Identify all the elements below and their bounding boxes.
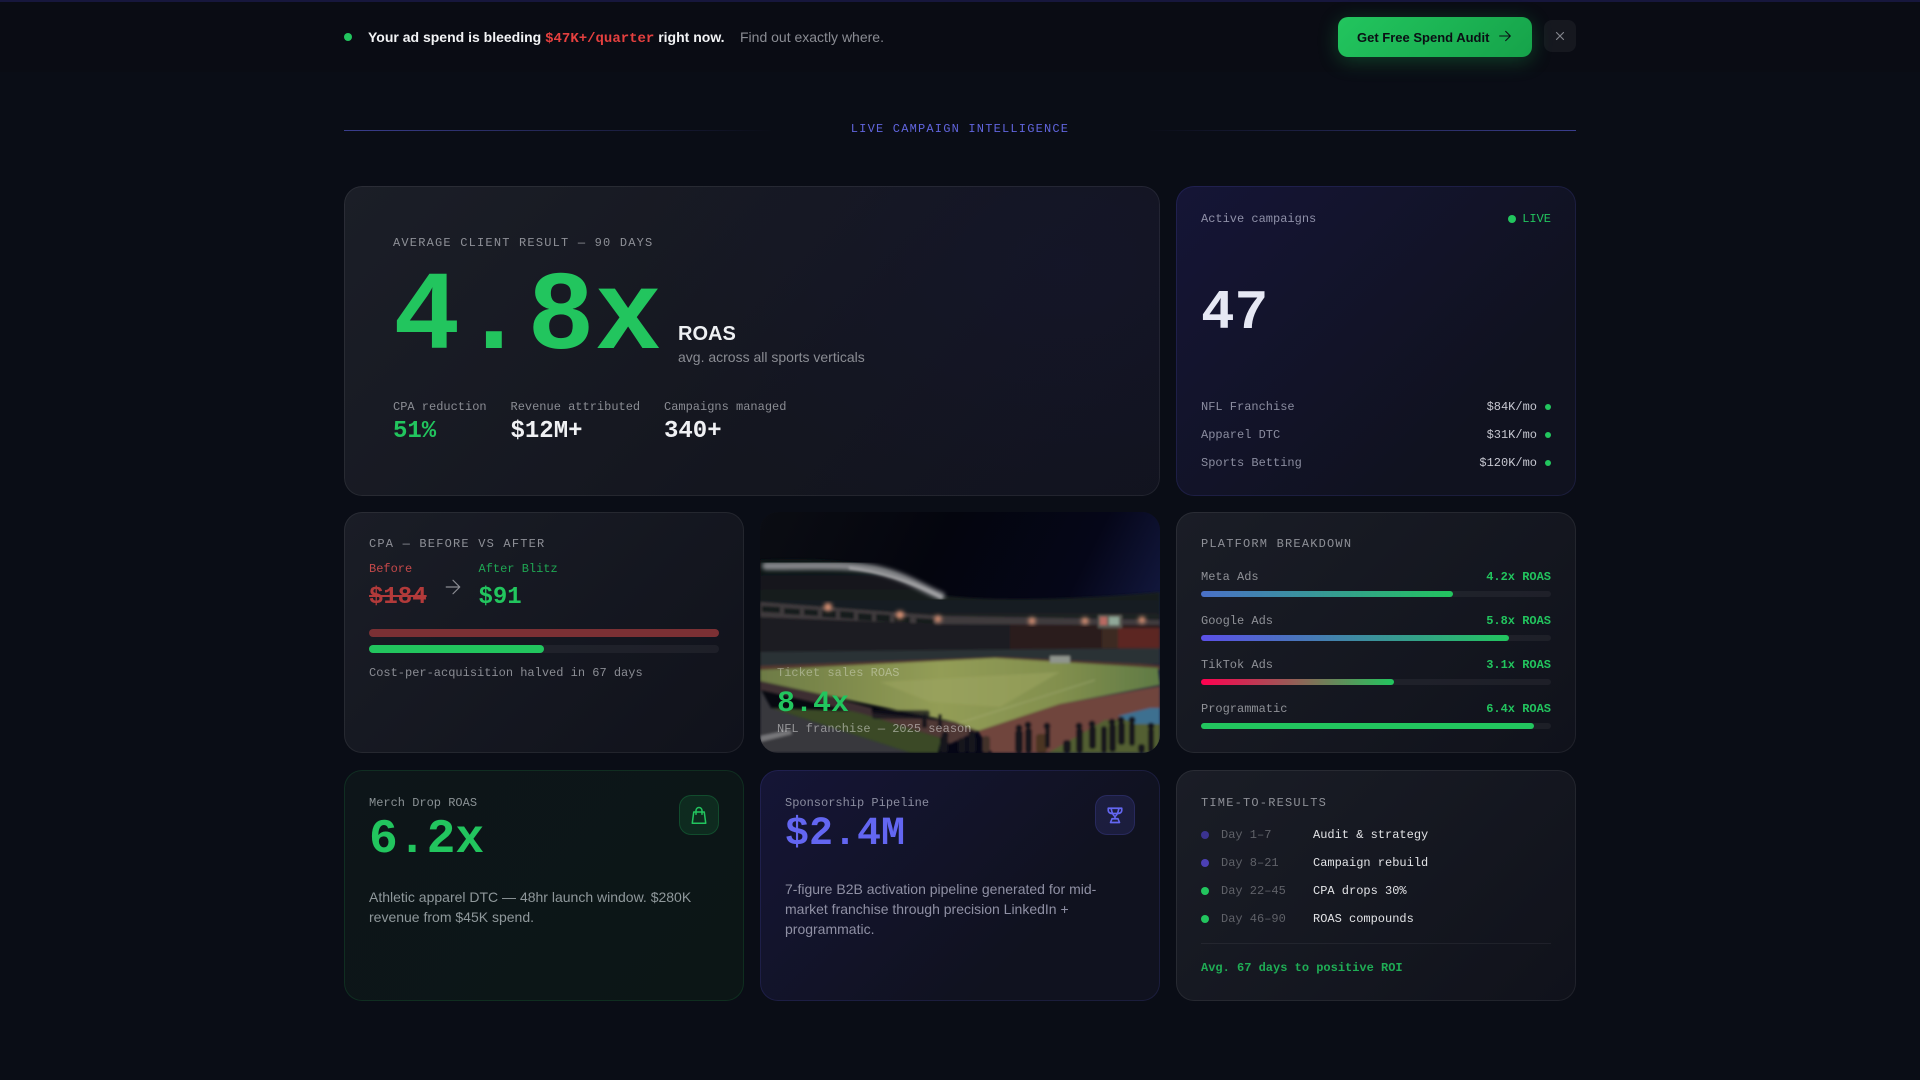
floodlights: [824, 603, 1146, 624]
after value: $91: [478, 584, 522, 611]
row: Meta Ads: Meta Ads: [1201, 570, 1259, 584]
stat: CPA reduction: CPA reduction: [393, 400, 487, 414]
ad boards: [760, 681, 872, 716]
lower tier and ad line: [760, 648, 1160, 670]
after value: After Blitz: [478, 562, 558, 576]
panel: sponsorship pipeline: [760, 770, 1160, 1001]
tarp: [1118, 708, 1160, 724]
icon: shopping bag: [679, 795, 719, 835]
row: Meta Ads: 4.2x ROAS: [1486, 570, 1551, 584]
row: Sports Betting: $120K/mo: [1479, 456, 1537, 470]
stat: CPA reduction: 51%: [393, 418, 436, 445]
footer note: Avg. 67 days to positive ROI: [1201, 961, 1403, 975]
balcony rail: [760, 602, 1160, 625]
row: Apparel DTC: $31K/mo: [1487, 428, 1537, 442]
icon: trophy: [1095, 795, 1135, 835]
label: active campaigns: Active campaigns: [1201, 212, 1316, 226]
ROAS label: ROAS: [678, 323, 736, 345]
merch description: Athletic apparel DTC — 48hr launch window. $280K revenue from $45K spend.: [369, 889, 691, 925]
sponsorship description: 7-figure B2B activation pipeline generated for mid-market franchise through precision LinkedIn + programmatic.: [785, 881, 1096, 937]
CTA button: [1338, 17, 1532, 57]
before value: $184: [369, 584, 427, 611]
row: Programmatic: 6.4x ROAS: [1486, 702, 1551, 716]
panel: CPA before vs after: [344, 512, 744, 753]
timeline: day 8-21: [1201, 856, 1428, 870]
stadium image: [760, 512, 1160, 753]
row: TikTok Ads: [1201, 658, 1551, 672]
panel: time to results: [1176, 770, 1576, 1001]
stat: revenue attributed: $12M+: [510, 418, 583, 445]
timeline: day 22-45: Day 22–45: [1221, 884, 1286, 898]
live indicator: [1508, 212, 1551, 226]
metric 6.2x: 6.2x: [369, 813, 484, 867]
before bar: [369, 629, 719, 637]
active campaign count: 47: [1201, 281, 1268, 345]
timeline: day 1-7: Audit & strategy: [1313, 828, 1428, 842]
row: Google Ads: [1201, 614, 1551, 628]
row: Google Ads: 5.8x ROAS: [1486, 614, 1551, 628]
after bar: [369, 645, 719, 653]
top accent line: [0, 0, 1920, 2]
timeline: day 8-21: Day 8–21: [1221, 856, 1279, 870]
panel: average client result: [344, 186, 1160, 496]
after value: [478, 562, 558, 611]
heading: platform breakdown: PLATFORM BREAKDOWN: [1201, 537, 1352, 551]
timeline: day 46-90: ROAS compounds: [1313, 912, 1414, 926]
bar: Meta Ads: [1201, 591, 1551, 597]
timeline: day 8-21: Campaign rebuild: [1313, 856, 1428, 870]
timeline: day 46-90: Day 46–90: [1221, 912, 1286, 926]
track right: [978, 686, 1160, 753]
CTA button: Get Free Spend Audit: [1357, 30, 1489, 45]
panel: active campaigns: [1176, 186, 1576, 496]
crowd silhouettes: [872, 710, 1154, 753]
track behind boards: [854, 711, 978, 744]
row: NFL Franchise: $84K/mo: [1487, 400, 1537, 414]
bar caption: Cost-per-acquisition halved in 67 days: [369, 666, 643, 680]
metric $2.4M: $2.4M: [785, 812, 905, 857]
panel: merch drop: [344, 770, 744, 1001]
alert banner: [0, 2, 1920, 72]
row: NFL Franchise: NFL Franchise: [1201, 400, 1295, 414]
row: Sports Betting: Sports Betting: [1201, 456, 1302, 470]
hero metric 4.8x: 4.8x: [393, 255, 662, 382]
upper stands: [760, 607, 1160, 657]
bar: Google Ads: [1201, 635, 1551, 641]
bar: TikTok Ads: [1201, 679, 1551, 685]
stat: CPA reduction: [393, 400, 487, 445]
scoreboard: [1098, 615, 1122, 628]
stat: revenue attributed: [510, 400, 640, 445]
label: average client result: AVERAGE CLIENT RESULT — 90 DAYS: [393, 236, 653, 250]
photo caption: ticket sales: Ticket sales ROAS: [777, 666, 899, 680]
pitch: [760, 658, 1160, 731]
timeline: day 1-7: [1201, 828, 1428, 842]
panel: platform breakdown: [1176, 512, 1576, 753]
timeline: day 22-45: [1201, 884, 1407, 898]
bottom right grass: [1048, 718, 1160, 753]
stat: campaigns managed: 340+: [664, 418, 722, 445]
row: Apparel DTC: [1201, 428, 1551, 442]
grey track left: [760, 688, 911, 753]
row: TikTok Ads: TikTok Ads: [1201, 658, 1273, 672]
before value: [369, 562, 427, 611]
photo caption: NFL franchise: NFL franchise — 2025 season: [777, 722, 971, 736]
timeline: day 1-7: Day 1–7: [1221, 828, 1271, 842]
status dot: [344, 33, 352, 41]
banner message: Your ad spend is bleeding $47K+/quarter right now.: [368, 29, 725, 47]
timeline: day 46-90: [1201, 912, 1414, 926]
heading: time to results: TIME-TO-RESULTS: [1201, 796, 1327, 810]
roof structure: [760, 559, 1160, 624]
dark green strip: [771, 708, 941, 753]
timeline: day 22-45: CPA drops 30%: [1313, 884, 1407, 898]
photo metric 8.4x: 8.4x: [777, 687, 849, 721]
row: Programmatic: [1201, 702, 1551, 716]
banner subtext: Find out exactly where.: [740, 29, 884, 45]
row: Programmatic: Programmatic: [1201, 702, 1287, 716]
roof light strip: [766, 566, 941, 596]
live indicator: LIVE: [1522, 212, 1551, 226]
row: Sports Betting: [1201, 456, 1551, 470]
section heading: LIVE CAMPAIGN INTELLIGENCE: [851, 122, 1069, 136]
heading: CPA before vs after: CPA — BEFORE VS AFTER: [369, 537, 545, 551]
stat: revenue attributed: Revenue attributed: [510, 400, 640, 414]
close button: [1544, 20, 1576, 52]
icon: arrow: [446, 580, 460, 594]
panel: stadium photo: [760, 512, 1160, 753]
row: TikTok Ads: 3.1x ROAS: [1486, 658, 1551, 672]
stat: campaigns managed: Campaigns managed: [664, 400, 786, 414]
before value: Before: [369, 562, 412, 576]
row: Google Ads: Google Ads: [1201, 614, 1273, 628]
row: NFL Franchise: [1201, 400, 1551, 414]
label: merch drop ROAS: Merch Drop ROAS: [369, 796, 477, 810]
icon: arrow right: [1499, 30, 1511, 42]
label: sponsorship pipeline: Sponsorship Pipeline: [785, 796, 929, 810]
ROAS caption: avg. across all sports verticals: [678, 349, 865, 365]
bar: Programmatic: [1201, 723, 1551, 729]
row: Meta Ads: [1201, 570, 1551, 584]
stat: campaigns managed: [664, 400, 786, 445]
row: Apparel DTC: Apparel DTC: [1201, 428, 1280, 442]
